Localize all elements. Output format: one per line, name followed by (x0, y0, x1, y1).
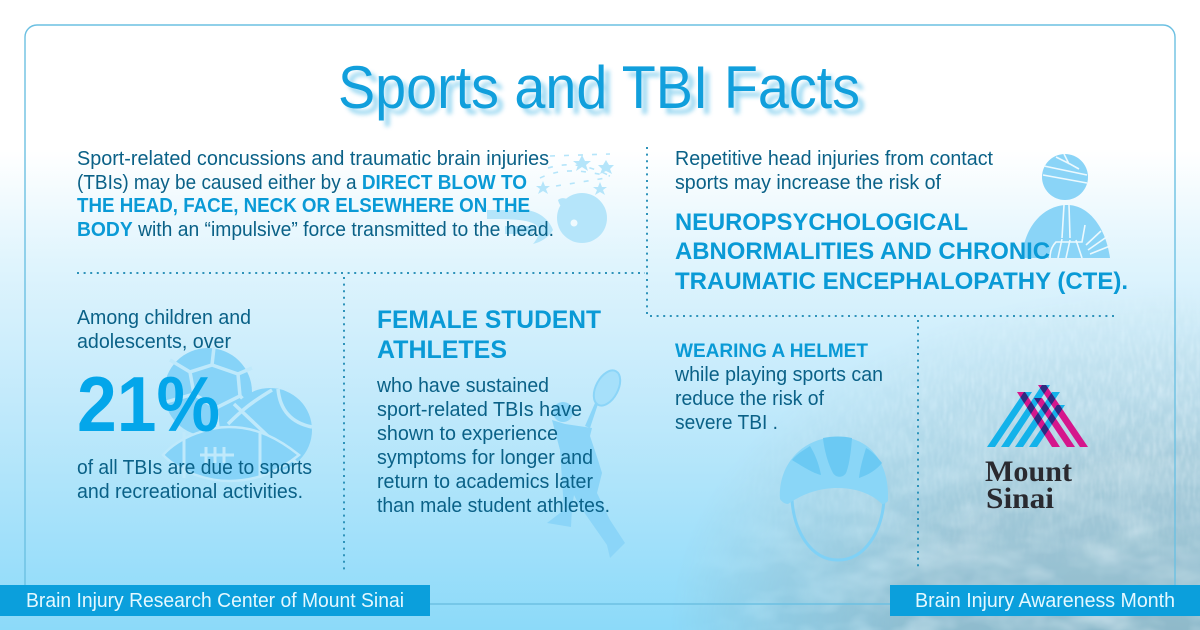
banner: awareness month: Brain Injury Awareness Month (915, 590, 1175, 612)
text: repetitive head injuries: sports may increase the risk of (675, 172, 941, 194)
text: repetitive head injuries (675, 148, 1128, 295)
text: 21 percent stat: of all TBIs are due to sports (77, 457, 312, 479)
text: wearing a helmet (674, 341, 883, 434)
text: direct blow paragraph: (TBIs) may be caused either by a DIRECT BLOW TO (77, 172, 527, 194)
text: repetitive head injuries: Repetitive head injuries from contact (675, 148, 993, 170)
icon: bicycle helmet (780, 436, 888, 560)
dotted dividers (77, 147, 1116, 570)
text: female student athletes: who have sustained (376, 375, 549, 397)
icon: head hit by ball with stars (487, 154, 614, 244)
logo wordmark: Mount (985, 455, 1072, 488)
text: direct blow paragraph: BODY with an “impulsive” force transmitted to the head. (77, 219, 554, 241)
text: 21 percent stat: and recreational activities. (77, 481, 303, 503)
logo wordmark: Sinai (986, 482, 1054, 515)
text: female student athletes: FEMALE STUDENT (377, 306, 601, 334)
text: 21 percent stat: Among children and (77, 307, 251, 329)
text: repetitive head injuries: ABNORMALITIES AND CHRONIC (675, 238, 1050, 265)
text: repetitive head injuries: TRAUMATIC ENCEPHALOPATHY (CTE). (675, 268, 1128, 295)
text: repetitive head injuries: NEUROPSYCHOLOGICAL (675, 209, 968, 236)
text: wearing a helmet: severe TBI . (675, 412, 778, 434)
text: female student athletes: symptoms for longer and (377, 447, 593, 469)
text: wearing a helmet: WEARING A HELMET (675, 341, 868, 362)
text: female student athletes: than male student athletes. (377, 495, 610, 517)
logo mark (987, 385, 1088, 447)
grass photo texture (706, 339, 1200, 630)
banner: research center: Brain Injury Research Center of Mount Sinai (26, 590, 404, 612)
text: direct blow paragraph (77, 148, 554, 241)
text: 21 percent stat: adolescents, over (77, 331, 231, 353)
text: female student athletes: shown to experience (377, 423, 558, 445)
text: female student athletes: sport-related TBIs have (377, 399, 582, 421)
text: wearing a helmet: while playing sports can (674, 364, 883, 386)
title: Sports and TBI Facts (338, 54, 860, 121)
text: female student athletes: return to academics later (377, 471, 593, 493)
text: wearing a helmet: reduce the risk of (675, 388, 824, 410)
text: female student athletes: ATHLETES (377, 336, 507, 364)
banner: awareness month (890, 585, 1200, 616)
title: Sports and TBI Facts (344, 60, 866, 127)
icon: tennis player silhouette (547, 366, 626, 558)
text: direct blow paragraph: THE HEAD, FACE, NECK OR ELSEWHERE ON THE (77, 195, 530, 217)
text: direct blow paragraph: Sport-related concussions and traumatic brain injuries (77, 148, 549, 170)
text: 21 percent stat (77, 307, 312, 503)
logo: Mount Sinai (985, 385, 1088, 515)
text: 21 percent stat: 21% (77, 360, 220, 448)
banner: research center (0, 585, 430, 616)
text: female student athletes (376, 306, 610, 517)
icon: sports balls (163, 347, 312, 481)
icon: bandaged person (1022, 154, 1110, 258)
logo wordmark (985, 455, 1072, 515)
